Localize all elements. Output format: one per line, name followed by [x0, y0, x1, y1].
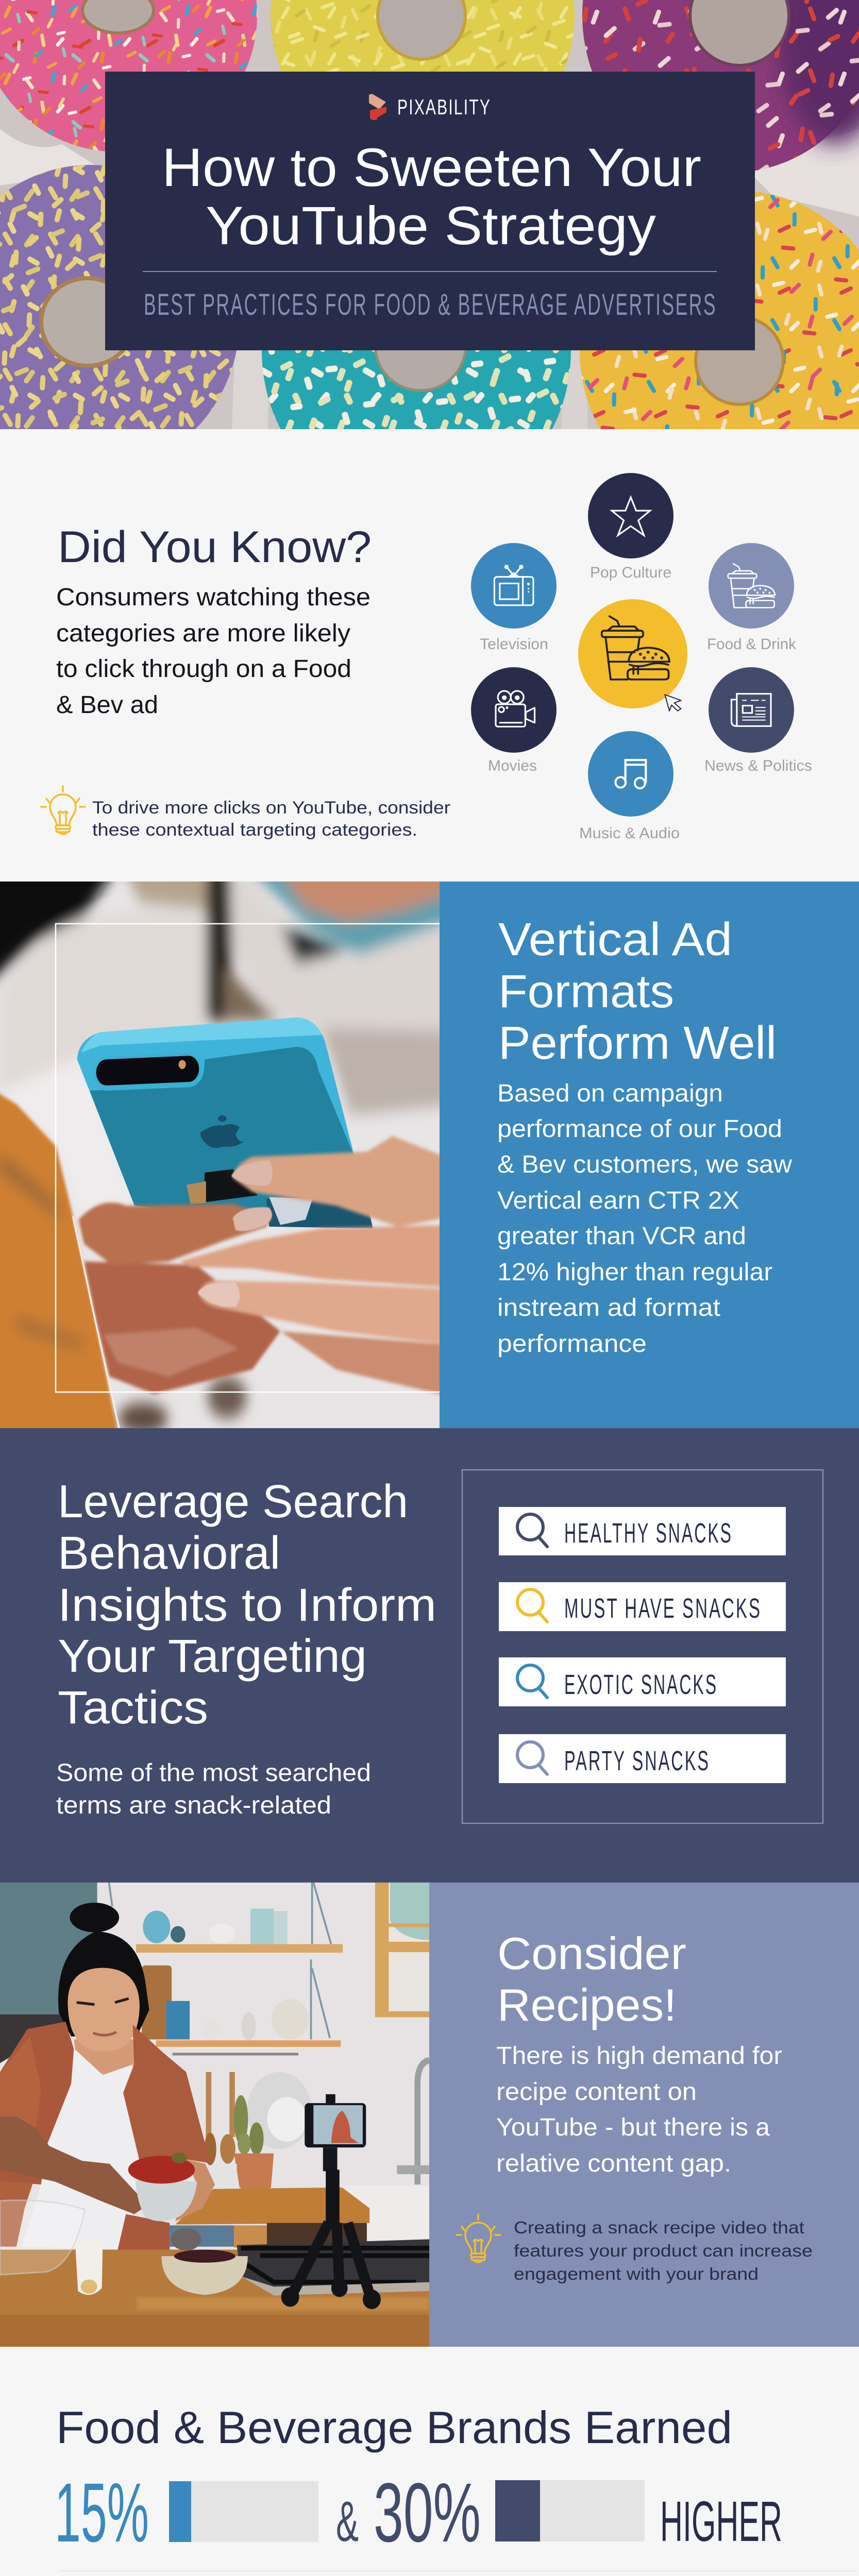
heading: leverage search: Tactics [58, 1682, 208, 1734]
heading: vertical ad formats: Vertical Ad [498, 914, 732, 965]
callout: snack recipe tip: Creating a snack recipe video that [514, 2218, 804, 2237]
hero title: How to Sweeten Your [162, 138, 701, 198]
fingernails [198, 1160, 273, 1307]
back counter [170, 2188, 369, 2248]
heading: leverage search: Leverage Search [58, 1476, 408, 1528]
glass bowl [0, 2200, 85, 2275]
circle: center food icon [578, 599, 687, 708]
circle: food and drink: Food & Drink [707, 636, 797, 653]
paper roll [75, 2241, 103, 2295]
photo: woman filming in kitchen [0, 1883, 429, 2347]
hands [78, 1136, 454, 1397]
blurred orange object [0, 1091, 119, 1439]
photo: hands holding blue phone [0, 882, 440, 1428]
hero title panel [105, 72, 755, 350]
callout: snack recipe tip [514, 2218, 813, 2283]
stove [237, 2239, 429, 2296]
search box: exotic snacks [499, 1657, 786, 1706]
stat: 30 percent: 30% [374, 2465, 481, 2560]
hero title [162, 138, 701, 256]
body: recipe content gap [496, 2042, 782, 2177]
stat: 15 percent: 15% [55, 2465, 149, 2560]
photo frame line [56, 924, 440, 1392]
icon: light bulb recipes [457, 2214, 500, 2262]
hero photo: donuts [0, 0, 859, 429]
body: vertical ad formats: 12% higher than regular [497, 1259, 772, 1286]
text: snack terms: Some of the most searched [56, 1759, 371, 1787]
text: did you know body: categories are more likely [56, 620, 350, 647]
body: vertical ad formats: Vertical earn CTR 2X [497, 1187, 739, 1214]
circle: music and audio [579, 731, 680, 842]
heading: did you know: Did You Know? [58, 522, 372, 572]
body: vertical ad formats: performance of our Food [497, 1115, 782, 1143]
heading: leverage search: Insights to Inform [58, 1580, 436, 1631]
circle: movies: Movies [488, 757, 537, 774]
heading: leverage search [58, 1476, 436, 1734]
bar: 15 percent [169, 2481, 318, 2542]
circle: food and drink [707, 543, 797, 653]
heading: leverage search: Behavioral [58, 1528, 280, 1579]
search box: must have snacks [499, 1582, 786, 1631]
shelving [109, 1883, 343, 2056]
callout: snack recipe tip: features your product can increase [514, 2241, 813, 2260]
callout: targeting tip: these contextual targeting categories. [92, 820, 417, 840]
heading: consider recipes [497, 1928, 686, 2030]
panel: vertical ad formats background [440, 882, 859, 1428]
icon: cursor [665, 694, 681, 711]
search terms frame [462, 1470, 823, 1823]
heading: consider recipes: Consider [497, 1928, 686, 1979]
text: snack terms: terms are snack-related [56, 1792, 331, 1819]
heading: brands earned: Food & Beverage Brands Earned [56, 2402, 732, 2453]
search box: healthy snacks: HEALTHY SNACKS [564, 1518, 733, 1549]
hanging utensils, colander and cactus [204, 2072, 312, 2192]
body: vertical ad formats [497, 1080, 792, 1358]
search box: healthy snacks [499, 1507, 786, 1555]
kitchen counter [0, 2250, 429, 2347]
text: snack terms [56, 1759, 371, 1819]
body: vertical ad formats: instream ad format [497, 1294, 720, 1321]
heading: vertical ad formats [498, 914, 777, 1069]
body: vertical ad formats: Based on campaign [497, 1080, 723, 1107]
heading: leverage search: Your Targeting [58, 1631, 367, 1682]
icon: light bulb [41, 786, 85, 834]
search box: exotic snacks: EXOTIC SNACKS [564, 1669, 718, 1700]
panel: search behavioral insights [0, 1428, 859, 1883]
panel: did you know [41, 473, 812, 842]
circle: television: Television [480, 636, 548, 653]
bar: 30 percent [495, 2480, 645, 2541]
heading: vertical ad formats: Formats [498, 966, 674, 1018]
tripod and phone [281, 2094, 381, 2309]
body: vertical ad formats: performance [497, 1330, 647, 1358]
callout: targeting tip [92, 798, 450, 840]
text: did you know body [56, 584, 370, 719]
logo: Pixability: PIXABILITY [397, 95, 491, 119]
cherry bowl [161, 2228, 248, 2295]
circle: television [471, 543, 557, 653]
search box: party snacks [499, 1734, 786, 1783]
search box: party snacks: PARTY SNACKS [564, 1745, 710, 1776]
body: vertical ad formats: greater than VCR and [497, 1223, 746, 1250]
circle: news and politics: News & Politics [704, 757, 812, 774]
text: did you know body: to click through on a Food [56, 655, 351, 683]
text: vertical ad formats [497, 914, 792, 1358]
body: recipe content gap: relative content gap. [496, 2150, 731, 2177]
panel: food and beverage stats [55, 2402, 857, 2576]
body: recipe content gap: recipe content on [496, 2078, 697, 2106]
body: vertical ad formats: & Bev customers, we saw [497, 1151, 792, 1178]
hero title: YouTube Strategy [206, 196, 656, 256]
circle: news and politics [704, 667, 812, 774]
circle: music and audio: Music & Audio [579, 825, 680, 842]
logo: Pixability [369, 94, 491, 120]
ampersand: & [336, 2490, 359, 2553]
category circles [471, 473, 812, 842]
person [0, 1903, 215, 2250]
wooden cabinet [375, 1883, 429, 2017]
faucet and sink [342, 2060, 429, 2241]
circle: pop culture [588, 473, 673, 581]
heading: consider recipes: Recipes! [497, 1979, 677, 2030]
heading: vertical ad formats: Perform Well [498, 1018, 777, 1069]
body: recipe content gap: There is high demand for [496, 2042, 782, 2070]
circle: pop culture: Pop Culture [590, 564, 671, 581]
text: consider recipes [496, 1928, 782, 2177]
callout: targeting tip: To drive more clicks on YouTube, consider [92, 798, 450, 818]
text: did you know body: & Bev ad [56, 691, 158, 719]
text: did you know body: Consumers watching these [56, 584, 370, 611]
panel: consider recipes background [429, 1883, 859, 2347]
phone body [77, 1018, 373, 1228]
body: recipe content gap: YouTube - but there is a [496, 2114, 770, 2141]
callout: snack recipe tip: engagement with your brand [514, 2264, 759, 2283]
circle: movies [471, 667, 557, 774]
